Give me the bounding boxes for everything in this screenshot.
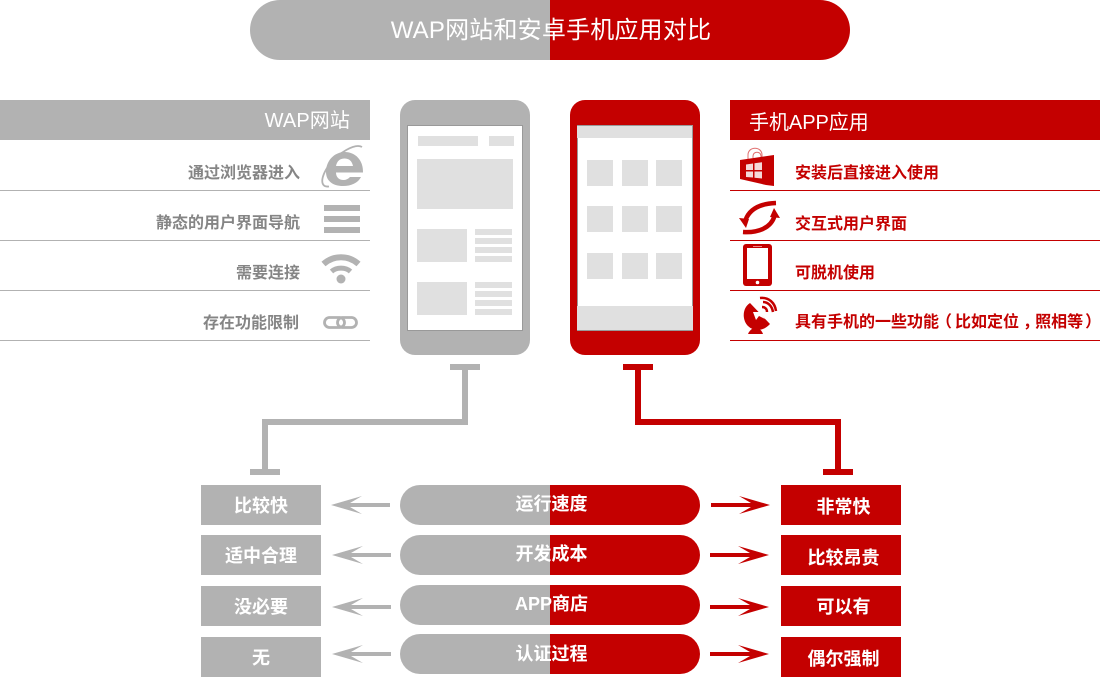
arrow right (711, 496, 770, 514)
arrow right (710, 598, 769, 616)
comparison row: speed (201, 485, 901, 525)
text: limited functions: 存在功能限制 (203, 315, 299, 332)
criterion (400, 585, 700, 625)
comparison row: certification (201, 634, 901, 677)
arrow left (331, 496, 390, 514)
app value: 比较昂贵 (808, 548, 880, 568)
WAP value: 比较快 (234, 496, 288, 516)
heading: WAP (0, 100, 370, 140)
text: direct use after install: 安装后直接进入使用 (795, 165, 939, 182)
arrow left (332, 598, 391, 616)
icon: menu bars (324, 205, 360, 233)
heading: app: 手机APP应用 (749, 112, 869, 134)
WAP value (201, 485, 321, 525)
WAP value: 适中合理 (225, 546, 297, 566)
criterion (400, 535, 700, 575)
phone: WAP layout (400, 100, 530, 355)
comparison row: cost (201, 535, 901, 575)
connector: app phone to right column (623, 364, 853, 475)
panel: WAP features (0, 100, 370, 341)
arrow right (710, 546, 769, 564)
comparison row: app store (201, 585, 901, 626)
app value: 可以有 (816, 597, 870, 617)
criterion: 开发成本 (516, 544, 588, 564)
app value (781, 485, 901, 525)
icon: wifi (324, 257, 358, 284)
app value: 偶尔强制 (808, 649, 880, 669)
title banner (250, 0, 850, 60)
app value (781, 535, 901, 575)
text: offline use: 可脱机使用 (795, 265, 875, 282)
text: browser entry: 通过浏览器进入 (188, 165, 300, 182)
criterion: 运行速度 (516, 494, 588, 514)
arrow right (710, 645, 769, 663)
app value: 非常快 (816, 497, 870, 517)
app value (781, 586, 901, 626)
text: phone functions: 具有手机的一些功能（比如定位，照相等） (795, 314, 1100, 331)
heading: WAP: WAP网站 (265, 110, 350, 132)
icon: store bag (740, 148, 774, 186)
criterion: 认证过程 (516, 644, 588, 664)
icon: browser e (322, 146, 363, 187)
criterion (400, 485, 700, 525)
icon: smartphone (743, 244, 772, 286)
criterion: APP商店 (515, 594, 588, 614)
text: static navigation: 静态的用户界面导航 (156, 215, 300, 232)
heading: app (730, 100, 1100, 140)
WAP value: 没必要 (234, 597, 288, 617)
text: connection required: 需要连接 (236, 265, 300, 282)
phone: app layout (570, 100, 700, 355)
row divider lines (0, 190, 370, 341)
text: interactive interface: 交互式用户界面 (795, 216, 907, 233)
app value (781, 637, 901, 677)
arrow left (332, 546, 391, 564)
title banner: WAP网站和安卓手机应用对比 (391, 17, 711, 44)
icon: chain link (324, 318, 356, 328)
icon: sync arrows (739, 203, 780, 232)
WAP value (201, 586, 321, 626)
row divider lines (730, 190, 1100, 341)
WAP value (201, 535, 321, 575)
panel: app features (730, 100, 1100, 341)
icon: satellite dish (744, 298, 776, 334)
WAP value: 无 (252, 648, 270, 668)
criterion (400, 634, 700, 674)
WAP value (201, 637, 321, 677)
arrow left (332, 645, 391, 663)
connector: WAP phone to left column (250, 364, 480, 475)
